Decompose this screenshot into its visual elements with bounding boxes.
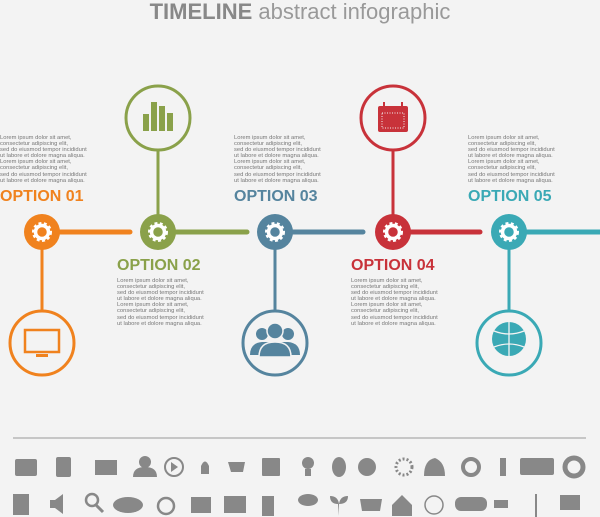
option 05 text: ut labore et dolore magna aliqua. — [468, 153, 553, 159]
option 01 text: ut labore et dolore magna aliqua. — [0, 178, 85, 184]
option 03 text: sed do eiusmod tempor incididunt — [234, 172, 321, 178]
option 01 text — [0, 135, 87, 184]
option 02 label: OPTION 02 — [117, 257, 201, 274]
option 05 text: ut labore et dolore magna aliqua. — [468, 178, 553, 184]
option 01 text: ut labore et dolore magna aliqua. — [0, 153, 85, 159]
option 03 text: sed do eiusmod tempor incididunt — [234, 147, 321, 153]
option 05 text: consectetur adipiscing elit, — [468, 141, 536, 147]
option 05 node — [477, 214, 600, 375]
divider — [13, 437, 586, 439]
option 05 text: consectetur adipiscing elit, — [468, 165, 536, 171]
option 04 text: consectetur adipiscing elit, — [351, 308, 419, 314]
option 05 text: sed do eiusmod tempor incididunt — [468, 147, 555, 153]
option 04 text — [351, 278, 438, 327]
option 03 label: OPTION 03 — [234, 188, 318, 205]
option 04 text: ut labore et dolore magna aliqua. — [351, 321, 436, 327]
option 01 text: sed do eiusmod tempor incididunt — [0, 147, 87, 153]
option 02 text: Lorem ipsum dolor sit amet, — [117, 278, 189, 284]
option 04 node — [361, 86, 480, 250]
option 03 text: consectetur adipiscing elit, — [234, 141, 302, 147]
icon rows — [13, 456, 583, 517]
option 02 node — [126, 86, 247, 250]
option 03 text: ut labore et dolore magna aliqua. — [234, 178, 319, 184]
option 04 text: consectetur adipiscing elit, — [351, 284, 419, 290]
option 03 text: consectetur adipiscing elit, — [234, 165, 302, 171]
option 04 text: ut labore et dolore magna aliqua. — [351, 296, 436, 302]
option 01 text: Lorem ipsum dolor sit amet, — [0, 159, 72, 165]
option 05 text: Lorem ipsum dolor sit amet, — [468, 159, 540, 165]
option 05 text — [468, 135, 555, 184]
option 05 label: OPTION 05 — [468, 188, 552, 205]
option 01 label: OPTION 01 — [0, 188, 84, 205]
option 05 text: sed do eiusmod tempor incididunt — [468, 172, 555, 178]
option 04 text: sed do eiusmod tempor incididunt — [351, 290, 438, 296]
option 01 node — [10, 214, 130, 375]
option 01 text: sed do eiusmod tempor incididunt — [0, 172, 87, 178]
option 03 node — [243, 214, 363, 375]
option 05 text: Lorem ipsum dolor sit amet, — [468, 135, 540, 141]
option 03 text: Lorem ipsum dolor sit amet, — [234, 159, 306, 165]
option 01 text: consectetur adipiscing elit, — [0, 165, 68, 171]
option 04 text: Lorem ipsum dolor sit amet, — [351, 278, 423, 284]
option 02 text: consectetur adipiscing elit, — [117, 284, 185, 290]
option 01 text: consectetur adipiscing elit, — [0, 141, 68, 147]
option 03 text: Lorem ipsum dolor sit amet, — [234, 135, 306, 141]
option 02 text: sed do eiusmod tempor incididunt — [117, 290, 204, 296]
option 02 text — [117, 278, 204, 327]
option 03 text: ut labore et dolore magna aliqua. — [234, 153, 319, 159]
option 02 text: ut labore et dolore magna aliqua. — [117, 321, 202, 327]
option 04 text: sed do eiusmod tempor incididunt — [351, 315, 438, 321]
option 03 text — [234, 135, 321, 184]
option 02 text: consectetur adipiscing elit, — [117, 308, 185, 314]
option 02 text: Lorem ipsum dolor sit amet, — [117, 302, 189, 308]
option 04 label: OPTION 04 — [351, 257, 435, 274]
option 01 text: Lorem ipsum dolor sit amet, — [0, 135, 72, 141]
option 02 text: sed do eiusmod tempor incididunt — [117, 315, 204, 321]
option 02 text: ut labore et dolore magna aliqua. — [117, 296, 202, 302]
option 04 text: Lorem ipsum dolor sit amet, — [351, 302, 423, 308]
